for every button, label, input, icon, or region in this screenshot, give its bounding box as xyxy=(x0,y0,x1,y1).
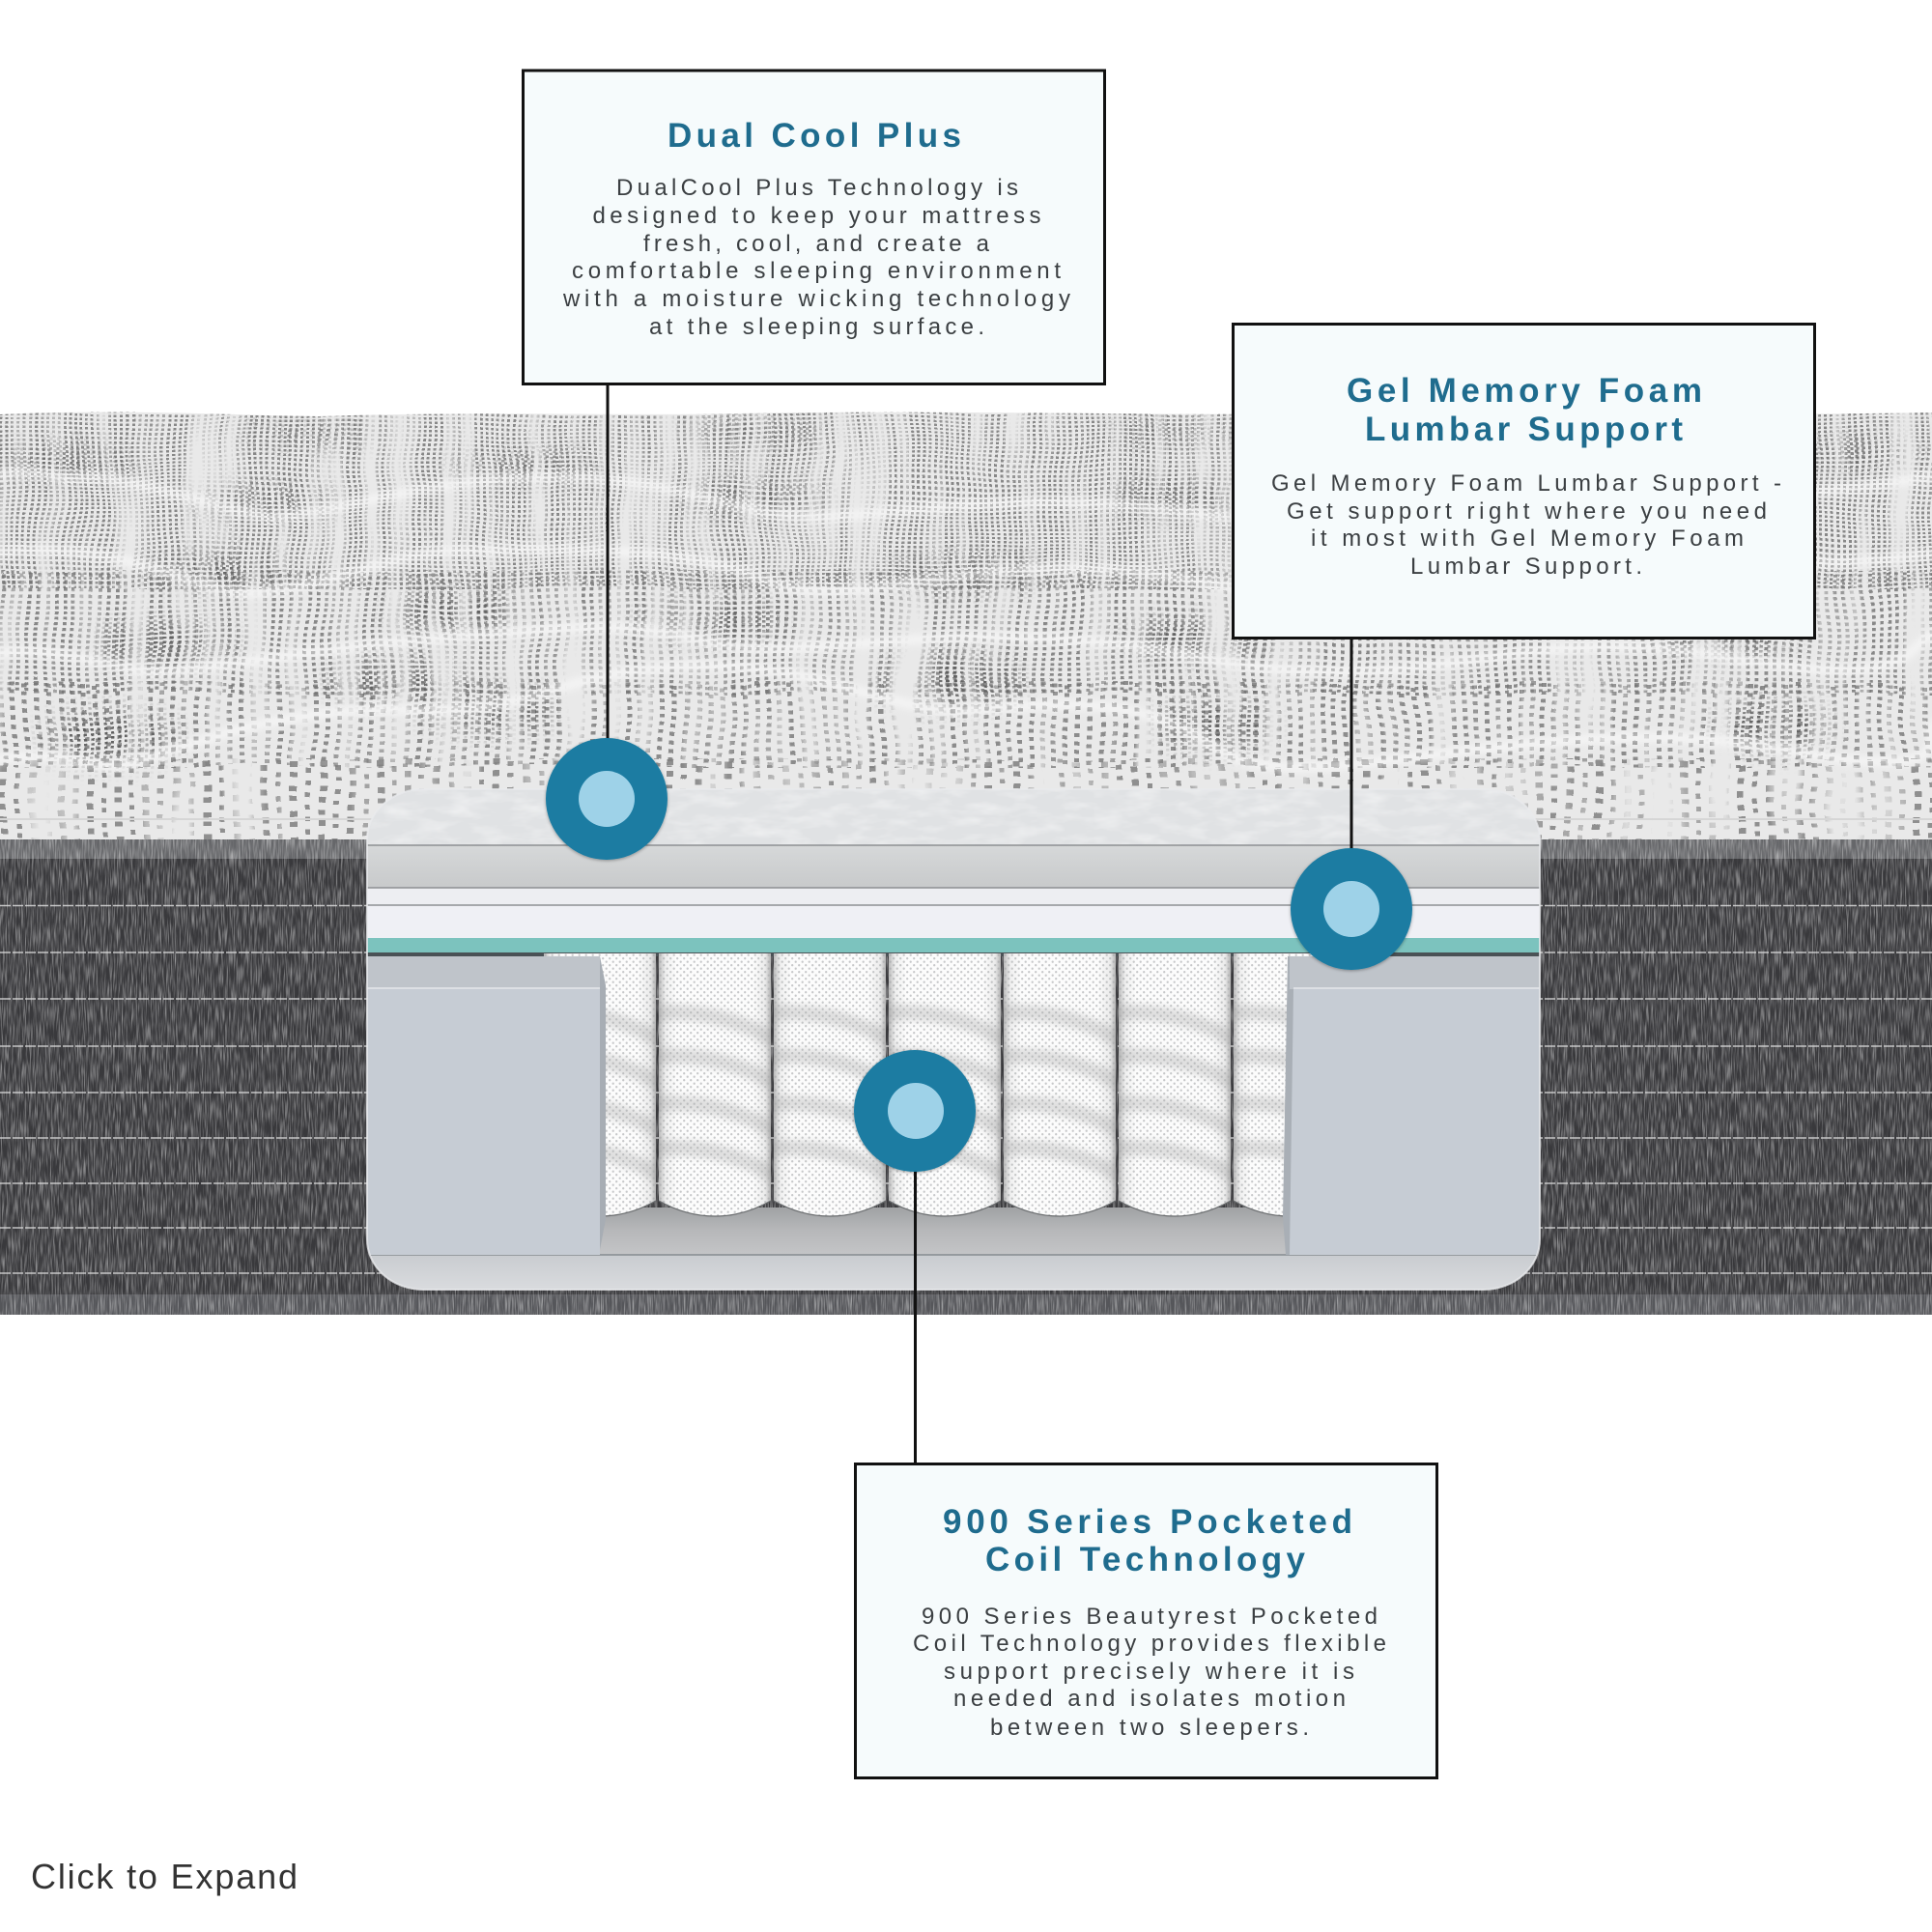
bottom foam layer xyxy=(367,1255,1540,1290)
callout body text: support precisely where it is xyxy=(944,1659,1354,1685)
callout heading xyxy=(943,1503,1352,1578)
callout body text: it most with Gel Memory Foam xyxy=(1311,526,1744,552)
callout heading: Lumbar Support xyxy=(1365,411,1683,448)
leader line: Gel Memory Foam xyxy=(1350,638,1352,850)
marker: Pocketed Coil xyxy=(854,1050,976,1172)
callout body text xyxy=(562,175,1070,340)
callout body text: with a moisture wicking technology xyxy=(562,286,1070,312)
right foam block xyxy=(1283,956,1540,1255)
mattress xyxy=(0,396,1932,1315)
callout heading: Gel Memory Foam xyxy=(1347,372,1702,410)
layer divider lines xyxy=(367,845,1540,905)
callout body text: between two sleepers. xyxy=(990,1715,1309,1741)
callout body text: Gel Memory Foam Lumbar Support - xyxy=(1271,470,1781,497)
leader line: Dual Cool Plus xyxy=(607,384,609,744)
mattress bottom band xyxy=(0,1294,1932,1315)
callout body text: 900 Series Beautyrest Pocketed xyxy=(922,1604,1378,1630)
callout heading: Coil Technology xyxy=(985,1541,1306,1578)
callout heading xyxy=(1347,372,1702,448)
callout body text xyxy=(1271,470,1781,580)
pocketed coils xyxy=(540,953,1350,1217)
leader line: Pocketed Coil xyxy=(914,1169,917,1464)
mattress dark side panel xyxy=(0,859,1932,1295)
callout body text: designed to keep your mattress xyxy=(593,203,1041,229)
mattress quilted top surface xyxy=(0,396,1932,850)
expand link: Click to Expand xyxy=(31,1857,298,1896)
callout: Dual Cool Plus xyxy=(524,71,1105,384)
layer: quilted foam xyxy=(367,789,1540,845)
left foam block xyxy=(367,956,606,1255)
cavity floor xyxy=(580,1208,1314,1256)
callout body text: fresh, cool, and create a xyxy=(643,231,990,257)
callout heading: 900 Series Pocketed xyxy=(943,1503,1352,1541)
callout body text xyxy=(913,1604,1386,1741)
callout body text: comfortable sleeping environment xyxy=(572,258,1061,284)
marker: Dual Cool Plus xyxy=(546,738,668,860)
layer: gray foam xyxy=(367,845,1540,888)
layer: white foam lower xyxy=(367,905,1540,938)
cutaway outline highlight xyxy=(367,789,1540,1290)
callout body text: Get support right where you need xyxy=(1287,498,1767,525)
callout heading: Dual Cool Plus xyxy=(668,117,961,155)
marker: Gel Memory Foam xyxy=(1291,848,1412,970)
callout body text: Lumbar Support. xyxy=(1410,554,1642,580)
mattress gray welt band xyxy=(0,839,1932,859)
side panel horizontal stitching xyxy=(0,906,1932,1273)
callout: 900 Series Pocketed Coil Technology xyxy=(856,1464,1437,1777)
callout body text: DualCool Plus Technology is xyxy=(616,175,1018,201)
callout body text: needed and isolates motion xyxy=(953,1686,1346,1712)
layer: teal gel foam xyxy=(367,938,1540,953)
mattress cross-section cutaway xyxy=(367,789,1540,1290)
layer: white foam upper xyxy=(367,888,1540,905)
callout body text: Coil Technology provides flexible xyxy=(913,1631,1386,1657)
callout: Gel Memory Foam Lumbar Support xyxy=(1233,325,1814,638)
callout body text: at the sleeping surface. xyxy=(649,314,984,340)
gap under teal layer xyxy=(367,952,1540,956)
